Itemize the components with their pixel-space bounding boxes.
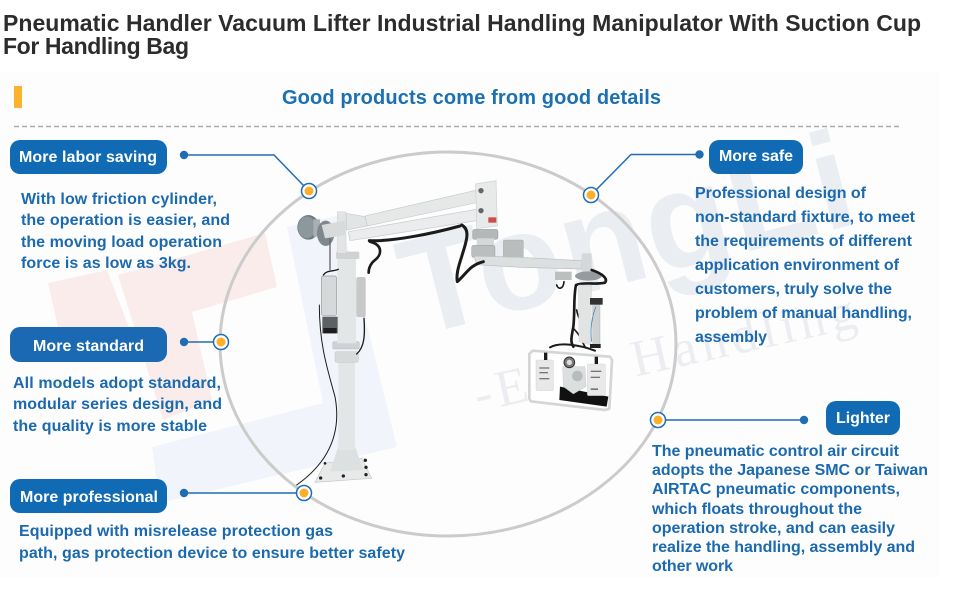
section heading: Good products come from good details (282, 87, 661, 109)
description (695, 185, 916, 346)
page title (3, 10, 921, 59)
watermark: logo and brand text: TongLi (384, 102, 869, 366)
marker dot (296, 486, 312, 500)
large ellipse ring (220, 152, 676, 536)
description: adopts the Japanese SMC or Taiwan (652, 462, 928, 479)
lifting mast (578, 285, 603, 348)
callout: more professional (10, 479, 405, 562)
page title: Pneumatic Handler Vacuum Lifter Industrial Handling Manipulator With Suction Cup (3, 10, 921, 36)
description: All models adopt standard, (13, 375, 221, 392)
description (21, 191, 230, 272)
description: The pneumatic control air circuit (652, 443, 900, 460)
description: operation stroke, and can easily (652, 520, 895, 537)
callout: lighter (650, 401, 928, 575)
counterweight discs (297, 215, 345, 270)
label pill: More standard (33, 338, 144, 355)
description: application environment of (695, 257, 900, 274)
column (333, 212, 359, 450)
label pill (10, 327, 167, 362)
description: path, gas protection device to ensure better safety (19, 545, 405, 562)
connector line (180, 151, 305, 187)
description: the quality is more stable (13, 418, 207, 435)
description: the requirements of different (695, 233, 913, 250)
marker dot (302, 184, 316, 198)
pivot joint (472, 229, 523, 258)
label pill: More labor saving (19, 149, 157, 166)
callout: more standard (10, 327, 228, 435)
page title: For Handling Bag (3, 33, 189, 59)
cylinders (321, 276, 365, 333)
connector line (665, 416, 808, 424)
description: modular series design, and (13, 396, 222, 413)
description (19, 523, 405, 562)
marker dot (650, 412, 666, 428)
black hoses (297, 225, 606, 485)
description: AIRTAC pneumatic components, (652, 481, 900, 498)
base plate (315, 447, 372, 482)
description: customers, truly solve the (695, 281, 892, 298)
forearm (474, 253, 602, 281)
watermark: logo and brand text (48, 102, 869, 503)
description (13, 375, 222, 435)
description: the operation is easier, and (21, 212, 230, 229)
description: realize the handling, assembly and (652, 539, 915, 556)
product illustration: pneumatic manipulator (297, 181, 612, 485)
label pill (10, 479, 167, 513)
description: force is as low as 3kg. (21, 255, 191, 272)
upper arm beams (346, 181, 497, 241)
watermark: logo and brand text: -Easy Handling (468, 283, 861, 424)
connector line (596, 150, 704, 190)
connector line (180, 489, 297, 497)
marker dot (214, 334, 228, 350)
label pill: Lighter (836, 410, 890, 427)
section heading accent bar (14, 86, 22, 108)
description: With low friction cylinder, (21, 191, 217, 208)
label pill (10, 140, 167, 174)
callout: more labor saving (10, 140, 316, 272)
label pill: More safe (719, 148, 793, 165)
description: other work (652, 558, 733, 575)
vacuum gripper frame (529, 351, 612, 410)
marker dot (584, 188, 598, 202)
callout: more safe (584, 140, 916, 346)
description: assembly (695, 329, 767, 346)
label pill: More professional (20, 489, 158, 506)
connector line (180, 338, 214, 346)
description (651, 443, 928, 575)
description: which floats throughout the (651, 501, 862, 518)
label pill (709, 140, 803, 174)
description: Equipped with misrelease protection gas (19, 523, 333, 540)
description: the moving load operation (21, 234, 222, 251)
description: non-standard fixture, to meet (695, 209, 916, 226)
description: Professional design of (695, 185, 867, 202)
description: problem of manual handling, (695, 305, 912, 322)
label pill (826, 401, 900, 435)
